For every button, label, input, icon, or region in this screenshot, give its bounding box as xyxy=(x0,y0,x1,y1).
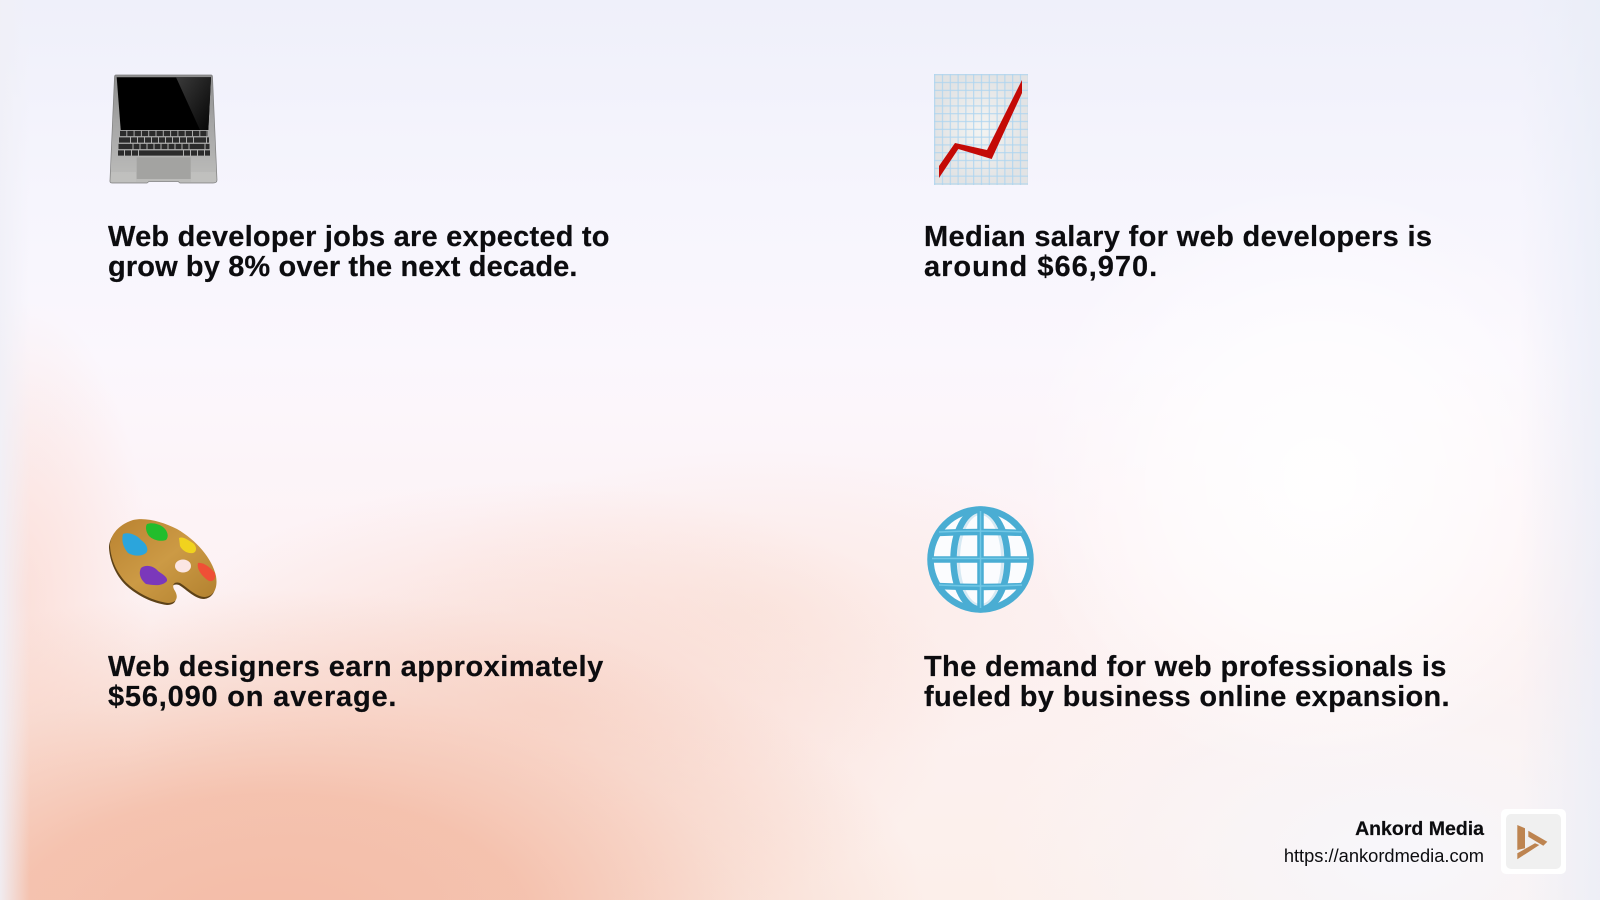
brand name: Ankord Media xyxy=(1355,818,1484,840)
text: median salary: Median salary for web developers is xyxy=(924,221,1432,253)
text: job growth: Web developer jobs are expected to xyxy=(108,221,610,253)
text: demand: fueled by business online expansion. xyxy=(924,681,1450,713)
text: demand xyxy=(924,651,1450,713)
text: designer earnings: Web designers earn approximately xyxy=(108,651,604,683)
text: median salary: around $66,970. xyxy=(924,251,1158,283)
text: job growth xyxy=(108,221,610,283)
icon: chart xyxy=(934,74,1028,185)
icon: laptop xyxy=(110,74,218,184)
icon: palette xyxy=(109,519,216,605)
text: designer earnings xyxy=(108,651,604,713)
text: job growth: grow by 8% over the next decade. xyxy=(108,251,578,283)
icon: globe xyxy=(927,506,1034,613)
brand url: https://ankordmedia.com xyxy=(1284,845,1484,866)
text: demand: The demand for web professionals is xyxy=(924,651,1447,683)
text: designer earnings: $56,090 on average. xyxy=(108,681,397,713)
text: median salary xyxy=(924,221,1432,283)
brand block xyxy=(1284,818,1484,866)
logo card xyxy=(1501,809,1566,874)
